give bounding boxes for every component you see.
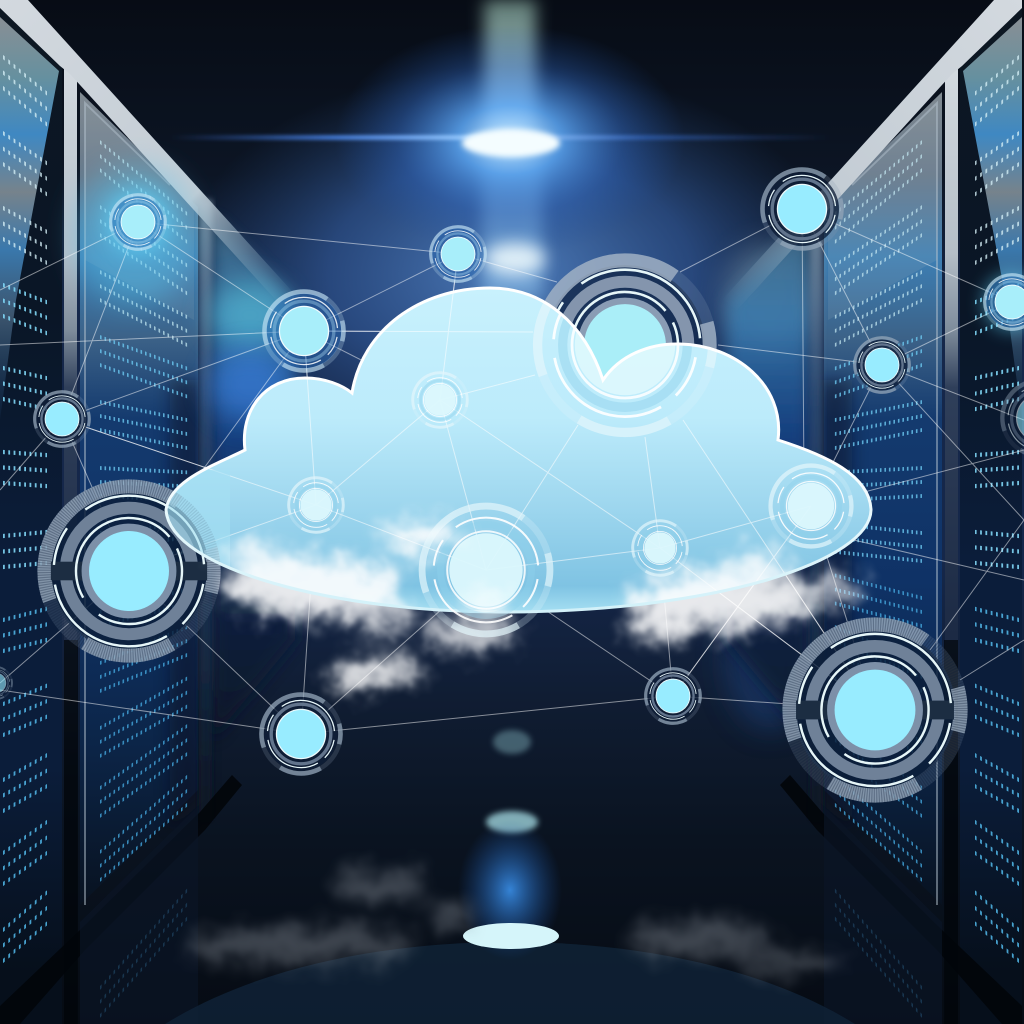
top lamp glow <box>335 25 685 255</box>
cloud outline <box>166 288 871 612</box>
big node: lower left <box>21 463 237 679</box>
floor reflection lamps <box>458 730 562 960</box>
top lamp <box>462 129 560 157</box>
node: below cloud right <box>638 661 708 731</box>
light column below the top lamp <box>482 150 542 300</box>
node: left edge partial <box>0 663 16 703</box>
big node: lower right <box>765 600 985 820</box>
floor reflection of clouds <box>185 869 840 972</box>
node: right edge glowing <box>977 267 1024 337</box>
node: below cloud left <box>250 683 352 785</box>
second ceiling lamp <box>485 243 545 275</box>
node: on cloud lower right <box>625 513 695 583</box>
node: right <box>847 330 917 400</box>
node: on cloud top <box>405 365 475 435</box>
glow: blue patch behind left cloud lobe <box>210 350 290 420</box>
node: upper left medium <box>253 280 355 382</box>
panel: right server rack <box>722 0 1022 1024</box>
lines visible through the cloud <box>62 254 875 710</box>
node: upper left glowing <box>103 187 173 257</box>
cloud tip overlapping the left node <box>168 470 230 566</box>
node: right edge partial <box>992 370 1024 466</box>
node: upper right medium <box>751 158 853 260</box>
panel: left server rack <box>0 0 300 1024</box>
node: on cloud right <box>759 454 863 558</box>
cloud body <box>166 288 871 612</box>
node: on cloud left <box>281 470 351 540</box>
big node behind the cloud <box>517 237 733 453</box>
white vapour clouds along the base <box>222 523 867 694</box>
node: far left <box>27 384 97 454</box>
node: top centre <box>423 219 493 289</box>
glow: blue light on left rack <box>75 165 195 305</box>
floor: reflective disc <box>165 942 855 1024</box>
lens flare <box>170 135 830 140</box>
big node seen through the cloud <box>533 303 717 437</box>
network connection lines <box>0 209 1024 734</box>
wisp over the centre node <box>414 523 509 615</box>
ceiling light beam <box>484 0 536 135</box>
node: on cloud centre <box>404 488 568 652</box>
glow: teal light left of upper node <box>210 283 290 347</box>
